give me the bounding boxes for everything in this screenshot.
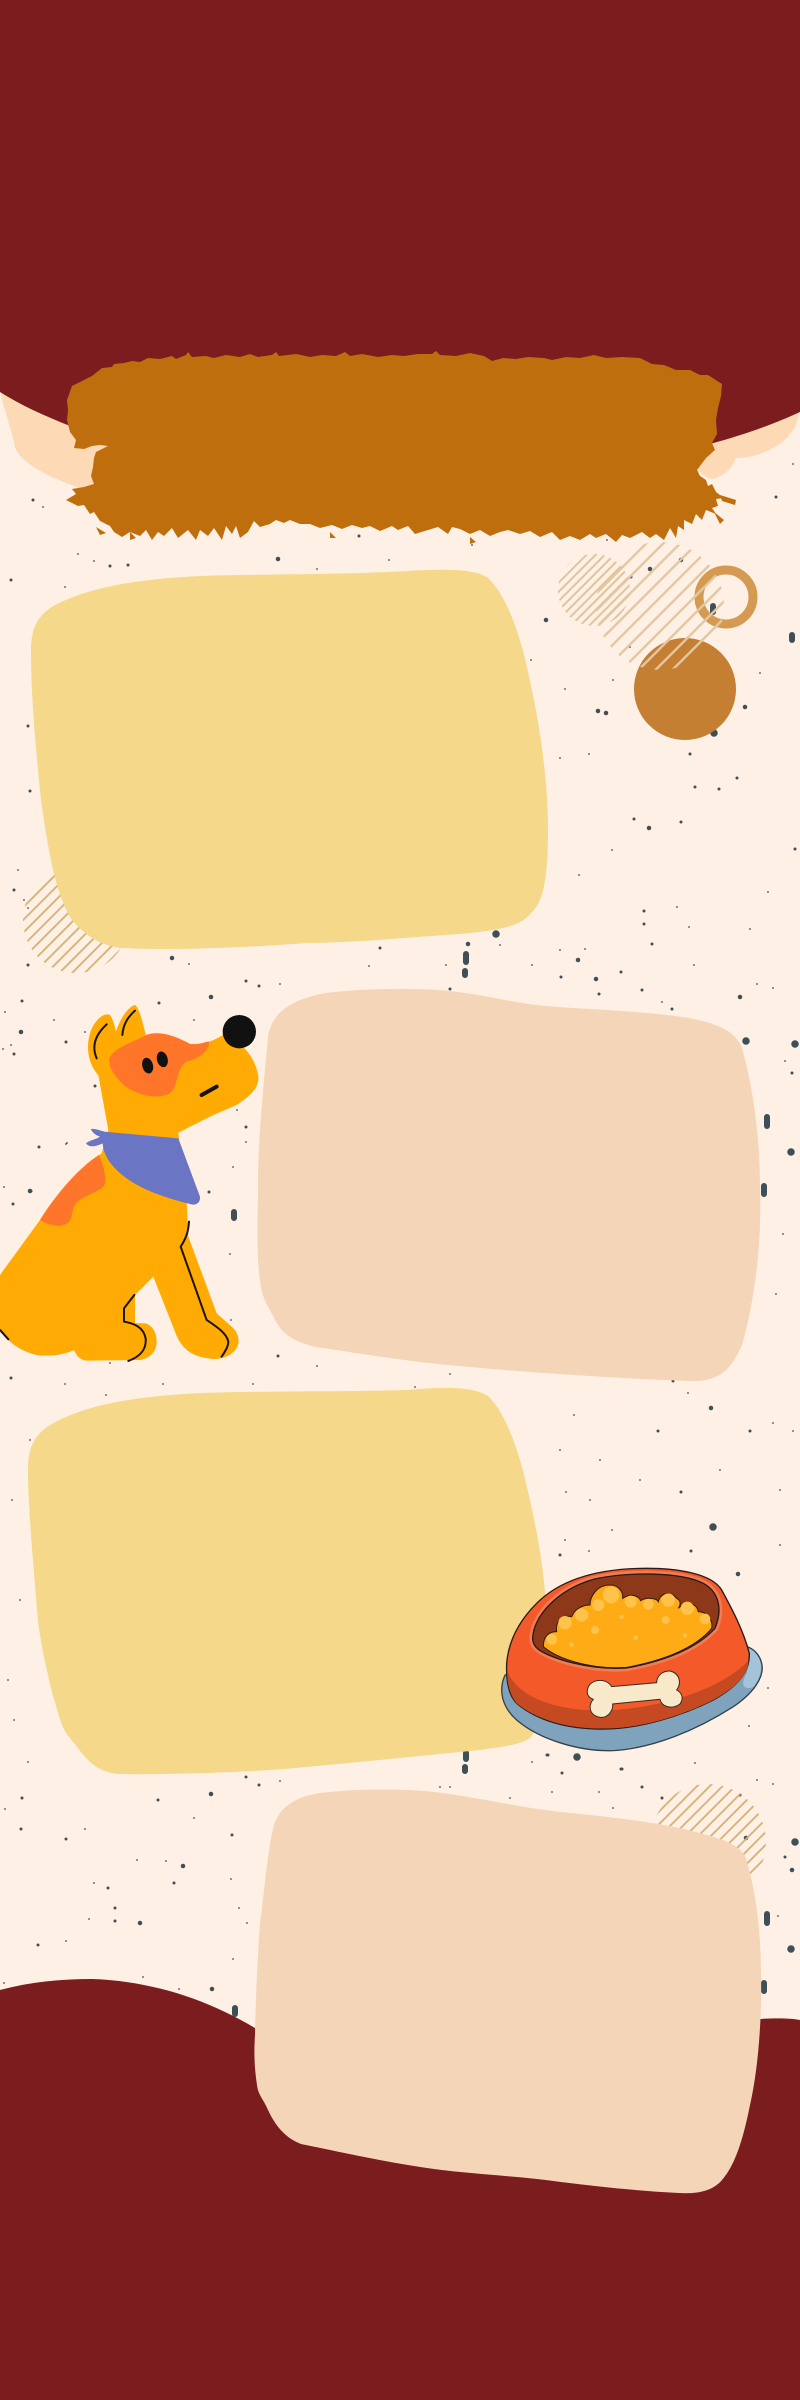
brush flecks — [96, 495, 736, 544]
bowl body — [507, 1568, 749, 1729]
hatched circle small — [558, 554, 630, 626]
icon: dog food bowl with bone — [502, 1568, 762, 1751]
panel 2: peach blob — [258, 989, 760, 1381]
icon: sitting dog with bandana — [0, 1005, 258, 1361]
eyes — [140, 1050, 170, 1075]
hatched circle large — [596, 542, 724, 670]
bowl rim — [533, 1574, 719, 1668]
hatched circle right — [650, 1784, 766, 1900]
peach shoulder blob behind header — [0, 380, 800, 488]
bone — [587, 1671, 682, 1717]
mouth and contour lines — [0, 1011, 228, 1361]
back patch — [40, 1155, 105, 1226]
kibble highlights — [546, 1587, 710, 1647]
bandana — [86, 1129, 200, 1205]
speckle texture — [3, 407, 795, 2014]
panel 1: yellow blob — [31, 570, 548, 949]
top maroon header band — [0, 0, 800, 480]
brush stroke title banner — [66, 351, 724, 542]
bowl opening — [533, 1574, 719, 1668]
head patch — [109, 1033, 209, 1096]
bowl shadow — [507, 1661, 749, 1728]
panel 4: peach blob — [254, 1790, 761, 2193]
panel 3: yellow blob — [28, 1388, 546, 1774]
plate highlight — [743, 1648, 761, 1688]
bottom maroon footer band — [0, 1979, 800, 2400]
decorative ring — [699, 570, 753, 624]
nose — [223, 1015, 256, 1048]
hatched circle lower left — [23, 867, 129, 973]
decorative filled circle — [634, 638, 736, 740]
kibble — [543, 1585, 712, 1668]
